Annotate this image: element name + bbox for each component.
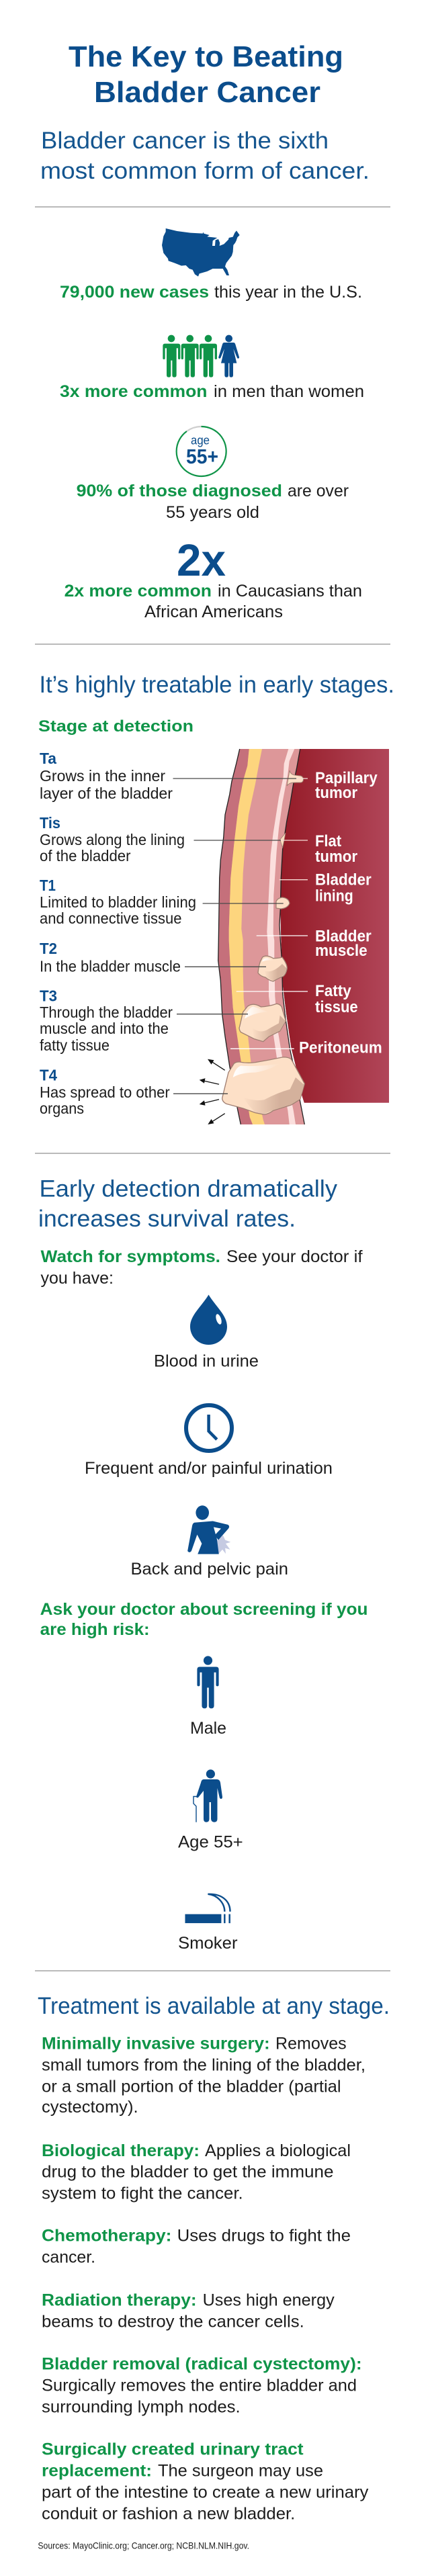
sources: Sources: MayoClinic.org; Cancer.org; NCBI.NLM.NIH.gov.: [38, 2540, 249, 2550]
diagram labels: [299, 769, 382, 1057]
icon: cigarette with smoke: [185, 1894, 230, 1923]
subheading: stage at detection: Stage at detection: [38, 717, 194, 736]
stage Tis: [40, 814, 185, 864]
icon: three men and one woman: [163, 335, 239, 377]
diagram labels: tumor: [315, 848, 357, 866]
symptom: back and pelvic pain: Back and pelvic pain: [130, 1560, 288, 1579]
treatment: biological therapy: [42, 2141, 351, 2203]
risk: smoker: Smoker: [178, 1934, 238, 1953]
treatment: bladder removal: Surgically removes the entire bladder and: [42, 2377, 357, 2395]
treatment: bladder removal: surrounding lymph nodes.: [42, 2398, 241, 2417]
panel: treatment list: [42, 2035, 369, 2524]
stage T4: Has spread to other: [40, 1083, 170, 1101]
icon: age 55+ ring: age: [191, 434, 210, 447]
T2 tumor: [258, 956, 287, 981]
risk: male: [190, 1656, 226, 1738]
treatment: minimally invasive surgery: [42, 2035, 366, 2117]
arrows: spread to other organs: [200, 1059, 225, 1124]
title: The Key to Beating: [69, 41, 343, 73]
treatment: chemotherapy: Chemotherapy:: [42, 2227, 171, 2246]
symptom: blood in urine: [154, 1295, 259, 1371]
stat: men versus women: in men than women: [214, 382, 364, 401]
stage Tis: Grows along the lining: [40, 831, 185, 848]
stage T3: [40, 987, 173, 1054]
stage Tis: Tis: [40, 814, 60, 832]
icon: clock: [186, 1405, 232, 1451]
stage Ta: Grows in the inner: [40, 767, 165, 785]
risk: age 55+: [178, 1769, 243, 1851]
intro heading: [40, 128, 370, 184]
treatment: chemotherapy: [42, 2227, 351, 2267]
text: ask about screening: are high risk:: [40, 1620, 150, 1639]
treatment: urinary tract replacement: part of the intestine to create a new urinary: [42, 2483, 369, 2502]
T1 tumor: [276, 897, 290, 909]
diagram labels: muscle: [315, 942, 368, 960]
treatment: minimally invasive surgery: cystectomy).: [42, 2098, 138, 2117]
icon: older man with cane: [194, 1769, 222, 1822]
intro heading: most common form of cancer.: [40, 158, 370, 184]
stage Tis: of the bladder: [40, 847, 131, 864]
icon: age 55+ ring: [177, 427, 226, 476]
stage Ta: [40, 750, 173, 802]
stage T4: organs: [40, 1100, 84, 1117]
treatment: radiation therapy: beams to destroy the cancer cells.: [42, 2313, 304, 2331]
symptom: back and pelvic pain: [130, 1505, 288, 1579]
treatment: bladder removal: [42, 2355, 362, 2417]
bladder wall layers: [218, 749, 310, 1124]
treatment: urinary tract replacement: replacement:: [42, 2462, 152, 2481]
heading: early detection: Early detection dramatically: [39, 1175, 338, 1202]
stat: age of diagnosis: 90% of those diagnosed: [77, 482, 282, 500]
stage T2: [40, 940, 181, 975]
treatment: chemotherapy: Uses drugs to fight the: [177, 2227, 351, 2246]
stat: men versus women: [60, 382, 364, 401]
stat: Caucasians versus African Americans: in Caucasians than: [218, 582, 362, 601]
treatment: biological therapy: Biological therapy:: [42, 2141, 200, 2160]
diagram labels: Bladder: [315, 928, 372, 946]
stage T3: Through the bladder: [40, 1004, 173, 1021]
stat: age of diagnosis: [77, 482, 349, 522]
treatment: radiation therapy: Radiation therapy:: [42, 2291, 197, 2310]
heading: treatment: Treatment is available at any stage.: [38, 1993, 390, 2019]
treatment: radiation therapy: Uses high energy: [203, 2291, 335, 2310]
heading: early detection: [38, 1175, 338, 1232]
icon: blood drop: [190, 1295, 227, 1345]
text: watch for symptoms: See your doctor if: [226, 1247, 363, 1266]
text: ask about screening: Ask your doctor about screening if you: [40, 1600, 368, 1619]
icon: age 55+ ring: 55+: [186, 445, 218, 468]
risk: male: Male: [190, 1719, 226, 1738]
icon: person holding lower back: [187, 1505, 230, 1554]
diagram labels: tissue: [315, 998, 358, 1016]
stat: age of diagnosis: are over: [288, 482, 349, 500]
treatment: minimally invasive surgery: or a small portion of the bladder (partial: [42, 2078, 341, 2096]
heading: early detection: increases survival rates.: [38, 1206, 296, 1232]
treatment: minimally invasive surgery: Removes: [275, 2035, 347, 2053]
risk: age 55+: Age 55+: [178, 1832, 243, 1851]
treatment: biological therapy: drug to the bladder to get the immune: [42, 2163, 333, 2182]
diagram labels: lining: [315, 887, 353, 905]
diagram labels: tumor: [315, 784, 357, 802]
panel: statistics: [60, 228, 364, 621]
symptom: frequent urination: Frequent and/or painful urination: [85, 1459, 333, 1478]
treatment: urinary tract replacement: Surgically created urinary tract: [42, 2440, 304, 2459]
panel: bladder wall diagram: [173, 749, 389, 1124]
text: watch for symptoms: Watch for symptoms.: [40, 1247, 220, 1266]
diagram labels: Bladder: [315, 871, 372, 889]
stage T4: [40, 1067, 170, 1117]
text: ask about screening: [40, 1600, 368, 1639]
stat: Caucasians versus African Americans: 2x more common: [64, 582, 212, 601]
risk: smoker: [178, 1894, 238, 1953]
stage T3: muscle and into the: [40, 1020, 169, 1037]
T2, T3 and T4 tumors: [222, 956, 304, 1114]
icon: map of the United States: [162, 228, 240, 277]
title: Bladder Cancer: [94, 77, 320, 109]
treatment: urinary tract replacement: [42, 2440, 369, 2524]
treatment: urinary tract replacement: conduit or fashion a new bladder.: [42, 2505, 295, 2524]
treatment: urinary tract replacement: The surgeon may use: [158, 2462, 323, 2481]
stage Ta: layer of the bladder: [40, 785, 173, 802]
title: [69, 41, 343, 109]
treatment: radiation therapy: [42, 2291, 335, 2331]
stat: men versus women: 3x more common: [60, 382, 207, 401]
diagram pointer lines: [173, 779, 308, 1094]
treatment: bladder removal: Bladder removal (radical cystectomy):: [42, 2355, 362, 2374]
treatment: chemotherapy: cancer.: [42, 2248, 95, 2267]
diagram labels: Papillary: [315, 769, 378, 787]
stat: new cases: [60, 283, 362, 302]
stat: age of diagnosis: 55 years old: [166, 503, 259, 522]
stat: Caucasians versus African Americans: [64, 582, 362, 621]
symptom: blood in urine: Blood in urine: [154, 1352, 259, 1371]
stat: Caucasians versus African Americans: African Americans: [144, 603, 283, 621]
stage T1: [40, 877, 196, 927]
icon: man: [197, 1656, 219, 1708]
symptom: frequent urination: [85, 1405, 333, 1478]
T4 tumor: [222, 1057, 304, 1114]
stage T3: T3: [40, 987, 57, 1005]
heading: highly treatable: It’s highly treatable in early stages.: [39, 672, 394, 698]
big number: 2x: 2x: [177, 535, 226, 586]
stat: new cases: this year in the U.S.: [214, 283, 362, 302]
text: watch for symptoms: you have:: [40, 1269, 114, 1288]
stage Ta: Ta: [40, 750, 57, 767]
diagram labels: Peritoneum: [299, 1039, 382, 1057]
panel: stage descriptions: [40, 750, 196, 1117]
papillary tumor: [287, 770, 304, 786]
diagram labels: Fatty: [315, 982, 351, 1000]
treatment: biological therapy: Applies a biological: [205, 2141, 351, 2160]
stage T3: fatty tissue: [40, 1036, 110, 1054]
T3 tumor: [239, 1004, 286, 1042]
stage T1: T1: [40, 877, 56, 894]
stage T1: and connective tissue: [40, 909, 181, 927]
stage T2: In the bladder muscle: [40, 958, 181, 975]
flat tumor: [280, 833, 286, 848]
treatment: minimally invasive surgery: Minimally invasive surgery:: [42, 2035, 270, 2053]
treatment: minimally invasive surgery: small tumors from the lining of the bladder,: [42, 2056, 366, 2075]
intro heading: Bladder cancer is the sixth: [41, 128, 329, 154]
stage T1: Limited to bladder lining: [40, 893, 196, 911]
diagram labels: Flat: [315, 832, 341, 850]
text: watch for symptoms: [40, 1247, 363, 1288]
stat: new cases: 79,000 new cases: [60, 283, 209, 302]
treatment: biological therapy: system to fight the cancer.: [42, 2184, 243, 2203]
stage T4: T4: [40, 1067, 57, 1084]
stage T2: T2: [40, 940, 57, 957]
red bladder interior: [280, 749, 389, 1103]
